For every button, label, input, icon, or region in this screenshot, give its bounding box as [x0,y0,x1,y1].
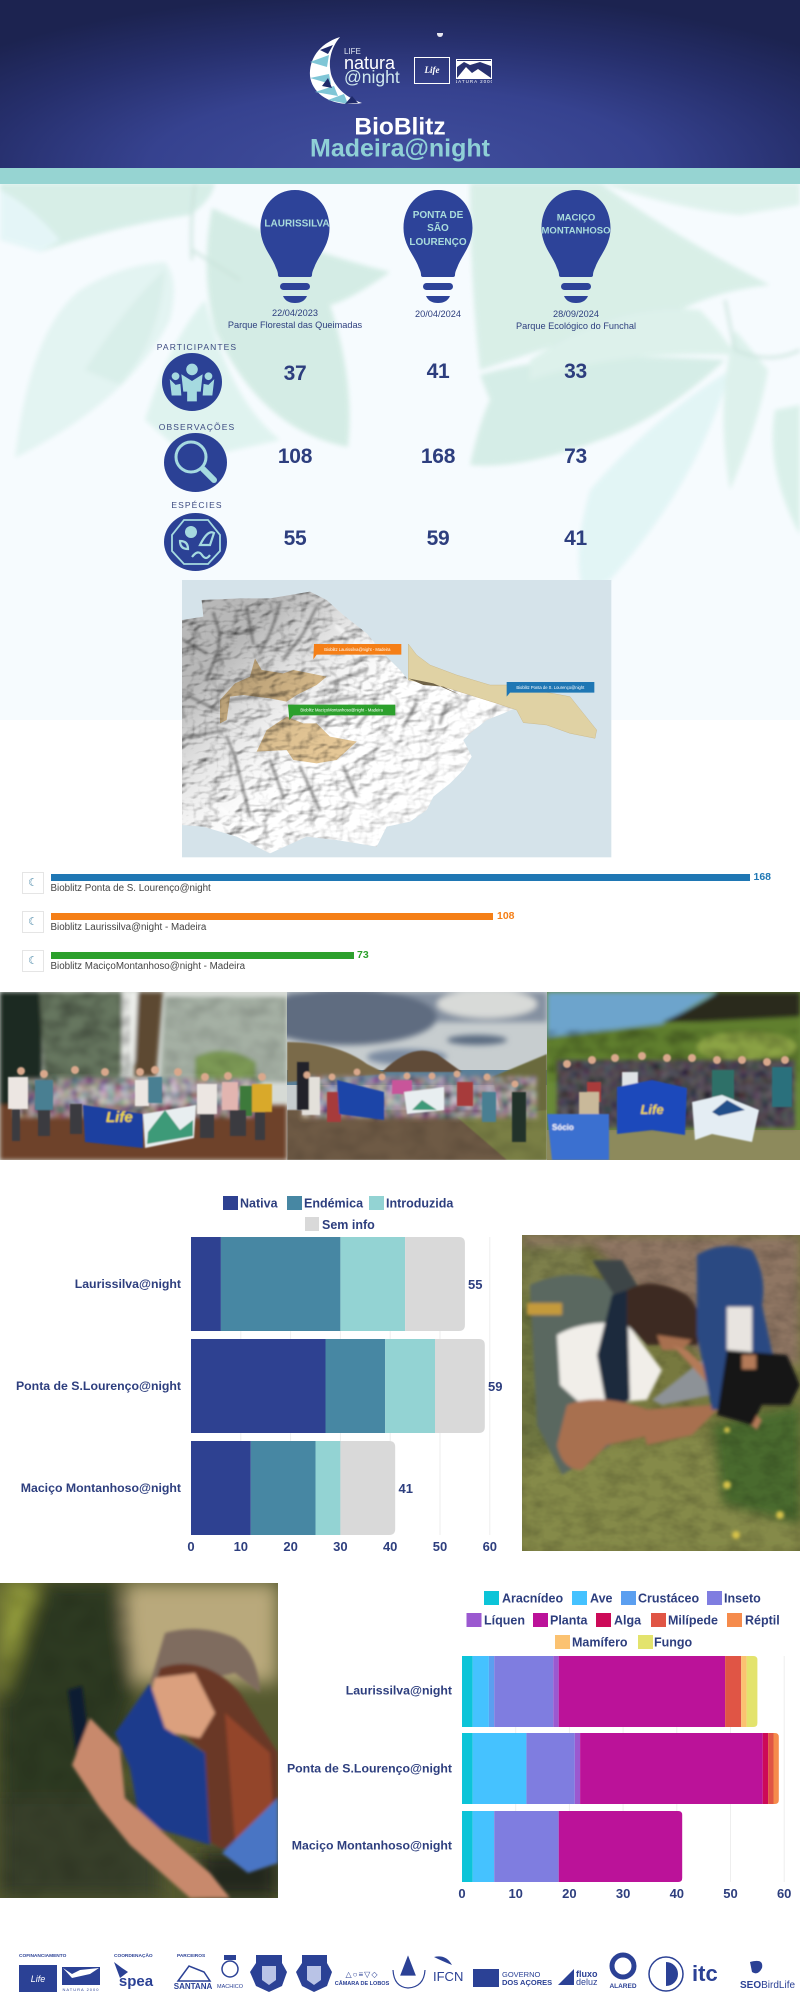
axis labels: 20 [283,1539,298,1554]
footer: IFCN: IFCN [433,1969,463,1984]
legend: taxa: Réptil [745,1614,780,1628]
footer: parceiros Santana [174,1953,212,1991]
teal band [0,168,800,184]
bars: Ponta de S.Lourenço: 59 [488,1379,502,1394]
photo: group Laurissilva [0,992,287,1160]
bulb label: Ponta de São Lourenço: SÃO [427,223,449,234]
axis labels: 30 [616,1886,630,1901]
axis labels: 40 [670,1886,684,1901]
stat: Maciço espécies: 41 [564,527,587,550]
chart: taxonomic groups by site [287,1591,791,1901]
label: participantes: PARTICIPANTES [157,342,237,352]
bars: Ponta de S.Lourenço [16,1339,502,1433]
footer: cofinanciamento [19,1953,100,1992]
footer: Câmara de Lobos: CÂMARA DE LOBOS [335,1980,390,1987]
bar row: Ponta de S. Lourenço: 168 [754,871,771,883]
icon: species [164,513,227,571]
title: Madeira@night [310,134,490,162]
logo text: @night [344,67,400,87]
axis labels [187,1539,497,1554]
bar row: Ponta de S. Lourenço [22,871,771,894]
date and place: Maciço Montanhoso: Parque Ecológico do Funchal [516,320,636,330]
icon: participants [162,353,222,411]
legend: endemism: Nativa [240,1196,279,1210]
photo: group Maciço Montanhoso: Life [640,1102,664,1117]
axis labels: 20 [562,1886,577,1901]
date and place: Laurissilva: 22/04/2023 [272,308,318,318]
title: BioBlitz [354,114,446,140]
footer: Governo dos Açores [473,1969,552,1987]
footer: cofinanciamento: COFINANCIAMENTO [19,1953,67,1959]
leaf background [0,184,800,720]
stat: Laurissilva observações: 108 [278,445,312,468]
bar row: Maciço Montanhoso: 73 [357,949,369,961]
date: Ponta de São Lourenço: 20/04/2024 [415,309,461,319]
map of Madeira [182,580,612,858]
footer: fluxo de luz: deluz [576,1977,598,1987]
map of Madeira: Bioblitz MaciçoMontanhoso@night - Madeira [300,708,384,713]
axis labels: 50 [433,1539,447,1554]
legend: taxa: Fungo [654,1636,693,1650]
footer: parceiros Santana: PARCEIROS [177,1953,206,1959]
bars: Maciço Montanhoso: Maciço Montanhoso@night [292,1838,452,1852]
bar row: Maciço Montanhoso [22,949,369,972]
bulb label: Ponta de São Lourenço: LOURENÇO [409,236,467,247]
legend: taxa: Alga [614,1614,642,1628]
bulb label: Laurissilva: LAURISSILVA [264,218,330,229]
photo: group Ponta de São Lourenço [287,992,547,1160]
axis labels: 30 [333,1539,348,1554]
logo: Natura 2000 [456,59,492,83]
stat: Maciço observações: 73 [564,445,587,468]
gridlines [241,1237,490,1535]
footer: Governo dos Açores: GOVERNO [502,1970,541,1979]
legend: taxa: Planta [550,1614,589,1628]
footer: crest two [296,1955,332,1992]
footer: cofinanciamento: NATURA 2000 [63,1987,99,1992]
footer: coordenação spea [114,1952,154,1990]
stat: Ponta espécies: 59 [427,527,449,550]
bar row: Laurissilva [22,910,515,933]
footer: emblem [393,1957,425,1988]
footer: Câmara de Lobos [335,1970,390,1987]
legend: endemism: Sem info [322,1218,375,1232]
legend: taxa [466,1591,780,1650]
bar row: Maciço Montanhoso: Bioblitz MaciçoMontanhoso@night - Madeira [50,960,245,972]
label: observações: OBSERVAÇÕES [159,422,235,432]
footer: IFCN [433,1956,463,1984]
legend: endemism: Introduzida [386,1196,454,1210]
stat: Ponta observações: 168 [421,445,455,468]
footer: seal [649,1957,683,1991]
legend: endemism: Endémica [304,1196,364,1210]
bulb: Maciço Montanhoso [542,190,610,303]
decorative dot [437,33,443,37]
photo: group Maciço Montanhoso [547,992,800,1160]
legend: taxa: Crustáceo [638,1592,699,1606]
photo: woman with phone [0,1583,278,1898]
bulb label: Maciço Montanhoso [542,212,610,236]
bars: Laurissilva: Laurissilva@night [75,1277,181,1291]
footer: Governo dos Açores: DOS AÇORES [502,1978,552,1987]
bars: Laurissilva [75,1237,482,1331]
axis labels: 60 [777,1886,791,1901]
gridlines [516,1656,784,1882]
logo: LIFE box: Life [424,65,440,75]
bars: Laurissilva: 55 [468,1277,482,1292]
bar row: Ponta de S. Lourenço: Bioblitz Ponta de S. Lourenço@night [50,882,211,894]
bars: Laurissilva: Laurissilva@night [346,1684,452,1698]
bars: Maciço Montanhoso [292,1811,682,1882]
legend: taxa: Aracnídeo [502,1592,563,1606]
legend: taxa: Inseto [724,1592,761,1606]
footer: ALARED [609,1955,637,1990]
stat: Maciço participantes: 33 [564,360,587,383]
footer: SEO BirdLife: SEOBirdLife [740,1980,795,1991]
axis labels: 0 [187,1539,195,1554]
date and place: Maciço Montanhoso: 28/09/2024 [553,308,599,318]
bar row: Maciço Montanhoso: ☾ [28,955,38,967]
bars: Laurissilva [346,1656,757,1727]
legend: endemism [223,1196,454,1232]
axis labels: 50 [723,1886,738,1901]
title [310,114,490,162]
axis labels: 60 [483,1539,497,1554]
axis labels: 10 [234,1539,248,1554]
map of Madeira: Bioblitz Ponta de S. Lourenço@night [516,685,585,690]
date and place: Laurissilva [228,308,362,330]
footer: SEO BirdLife [740,1961,795,1991]
bars: Maciço Montanhoso: Maciço Montanhoso@night [21,1481,181,1495]
bar row: Ponta de S. Lourenço: ☾ [28,877,38,889]
bulb label: Ponta de São Lourenço [409,209,467,247]
chart: endemism by site [16,1196,502,1554]
logo text: LIFE [344,47,361,56]
photo: group Laurissilva: Life [106,1109,133,1126]
legend: taxa: Milípede [668,1614,718,1628]
axis labels [458,1886,791,1901]
label: espécies: ESPÉCIES [171,500,223,510]
bulb label: Ponta de São Lourenço: PONTA DE [413,209,463,220]
bulb label: Maciço Montanhoso: MACIÇO [557,212,595,223]
logo: natura@night moon [310,37,362,104]
footer: Machico: MACHICO [217,1984,244,1990]
bar row: Laurissilva: 108 [497,910,515,922]
logo: LIFE box [414,57,450,84]
bulb: Ponta de São Lourenço [404,190,472,303]
bars: Maciço Montanhoso: 41 [398,1481,413,1496]
logo text: natura [344,53,395,73]
footer: itc: itc [692,1961,718,1986]
bulb: Laurissilva [260,190,330,303]
footer: coordenação spea: COORDENAÇÃO [114,1952,153,1959]
footer: fluxo de luz [558,1969,598,1987]
date and place: Laurissilva: Parque Florestal das Queimadas [228,320,362,330]
bars: Ponta de S.Lourenço: Ponta de S.Lourenço@night [16,1379,181,1393]
axis labels: 40 [383,1539,397,1554]
stat: Laurissilva participantes: 37 [284,362,306,385]
header banner [0,0,800,168]
footer: cofinanciamento: Life [31,1974,45,1984]
stat: Laurissilva espécies: 55 [284,527,306,550]
bars: Ponta de S.Lourenço [287,1733,779,1804]
photo: two people crouching [522,1235,800,1551]
footer: parceiros Santana: SANTANA [174,1982,212,1991]
legend: taxa: Ave [590,1592,613,1606]
photo: group Maciço Montanhoso: Sócio [552,1123,574,1132]
footer: fluxo de luz: fluxo [576,1969,598,1979]
map of Madeira: Bioblitz Laurissilva@night - Madeira [324,647,391,652]
footer: coordenação spea: spea [119,1973,154,1990]
bars: Maciço Montanhoso [21,1441,413,1535]
bars: Ponta de S.Lourenço: Ponta de S.Lourenço@night [287,1762,452,1776]
footer logos [19,1952,795,1992]
logo text [344,47,400,87]
bar row: Laurissilva: ☾ [28,916,38,928]
axis labels: 10 [508,1886,523,1901]
footer: Machico [217,1955,244,1990]
bulb label: Maciço Montanhoso: MONTANHOSO [542,226,610,236]
legend: taxa: Líquen [484,1614,525,1628]
stat: Ponta participantes: 41 [427,360,449,383]
icon: magnifier [164,433,227,492]
footer: crest one [250,1955,287,1992]
footer: ALARED: ALARED [609,1983,637,1990]
bar row: Laurissilva: Bioblitz Laurissilva@night - Madeira [50,922,206,932]
legend: taxa: Mamífero [572,1636,628,1650]
footer: Câmara de Lobos: △○≡▽◇ [346,1970,378,1979]
axis labels: 0 [458,1886,466,1901]
date and place: Maciço Montanhoso [516,308,636,331]
